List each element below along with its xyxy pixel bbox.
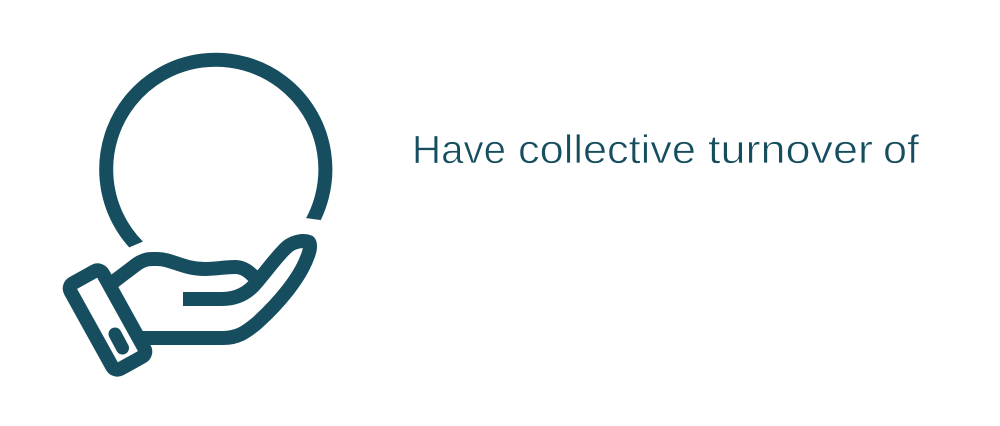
icon: cuff button: [115, 334, 122, 348]
text: have collective turnover of: Have: [412, 128, 506, 172]
text: have collective turnover of: [412, 128, 920, 172]
icon: palm and fingers: [141, 241, 310, 338]
text: have collective turnover of: turnover: [708, 128, 873, 172]
icon: hand top edge: [112, 259, 255, 283]
icon: open circle: [106, 60, 335, 272]
icon: hand holding a circle: [68, 60, 335, 372]
icon: shirt cuff: [68, 268, 147, 372]
text: have collective turnover of: collective: [518, 128, 696, 172]
text: have collective turnover of: of: [883, 128, 920, 172]
